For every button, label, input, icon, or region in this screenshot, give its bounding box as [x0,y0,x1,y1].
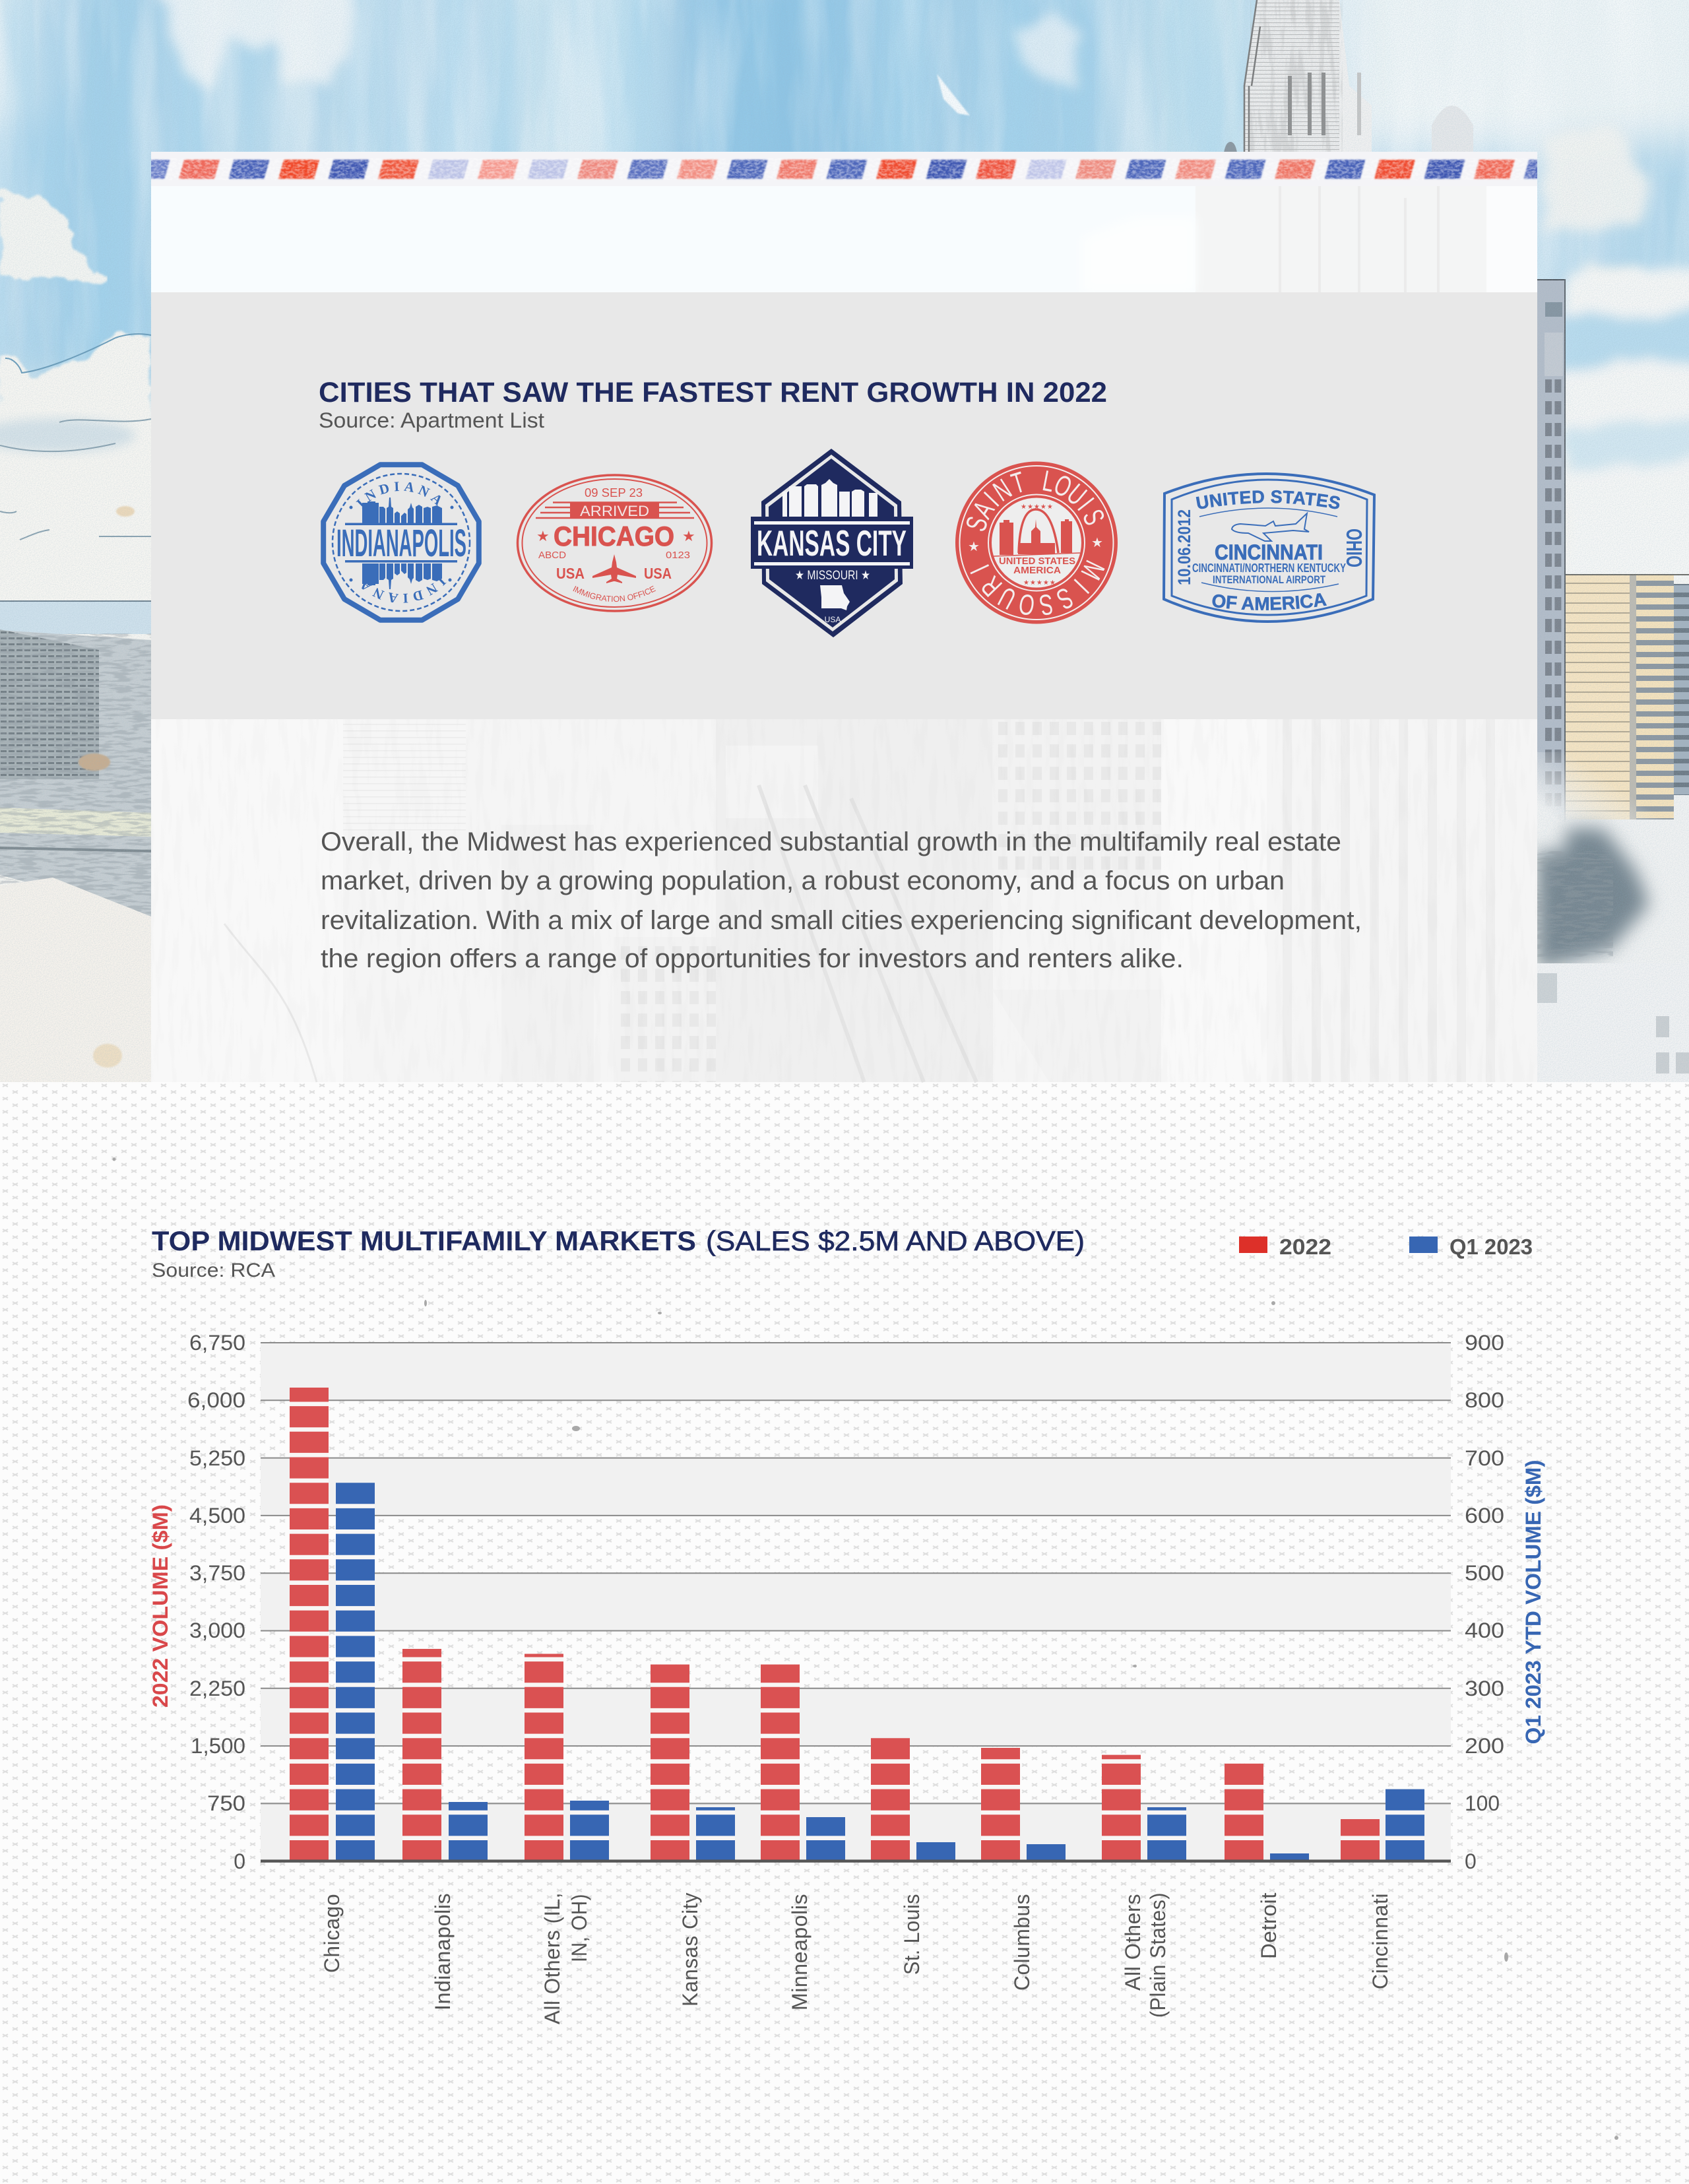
category labels: Cincinnati [1368,1893,1392,1989]
stamp: Kansas City: KANSAS CITY [757,523,907,563]
stamp: Chicago: ★ [682,528,695,544]
stamp: Indianapolis: INDIANA [362,579,446,603]
stamp: Saint Louis: A [966,495,1001,524]
bars: Kansas City [651,1665,735,1861]
left axis labels [187,1331,245,1873]
stamp: Cincinnati: CINCINNATI [1215,540,1323,564]
stamp: Chicago: 0123 [666,550,690,561]
heading: fastest rent growth: CITIES THAT SAW THE FASTEST RENT GROWTH IN 2022 [319,377,1107,408]
stamp: Cincinnati: OHIO [1342,529,1366,567]
right axis labels: 200 [1465,1734,1504,1758]
category labels: Kansas City [678,1892,702,2007]
stamp: Saint Louis: ★ [1091,536,1103,550]
left axis labels: 5,250 [189,1446,245,1470]
stamp: Saint Louis: M [1075,556,1111,585]
right axis labels: 300 [1465,1677,1504,1700]
watercolor grain [0,0,1689,1082]
specks on paper [112,1157,1618,2140]
category labels: Detroit [1257,1892,1281,1959]
bars: Cincinnati [1341,1789,1424,1861]
stamp: Saint Louis: O [1049,468,1077,503]
left column: clouds, lake and city [0,334,151,1082]
stamp: Chicago: ARRIVED [580,503,649,519]
left axis labels: 0 [234,1849,245,1873]
left axis title: 2022 VOLUME ($M) [148,1504,172,1708]
category labels: St. Louis [900,1894,924,1975]
right axis labels: 800 [1465,1388,1504,1412]
legend: Q1 2023 [1450,1235,1533,1259]
stamp: Saint Louis: ★ [968,540,980,554]
bars: All Others (IL, IN, OH) [525,1654,609,1861]
right axis labels: 900 [1465,1331,1504,1355]
right axis labels: 400 [1465,1619,1504,1642]
stamp: Saint Louis: S [1037,588,1056,622]
airmail stripe border [151,158,1537,181]
stamp: Saint Louis: L [1040,464,1057,498]
stamp: Saint Louis: S [1052,581,1078,616]
stamp: Indianapolis: INDIANAPOLIS [336,522,466,565]
stamp: Saint Louis: T [1007,465,1029,500]
right axis labels: 700 [1465,1446,1504,1470]
bars: Columbus [981,1748,1066,1861]
right axis labels: 100 [1465,1791,1500,1815]
stamp: Chicago: USA [556,565,585,582]
stamp: Saint Louis: ★★★★★ [1021,503,1054,511]
text block: Midwest growth summary: market, driven by a growing population, a robust economy, and a focus on urban [321,866,1285,895]
stamp: Saint Louis: S [1076,505,1111,530]
left axis labels: 2,250 [189,1677,245,1700]
left axis labels: 3,750 [189,1561,245,1585]
stamp: Saint Louis: O [1017,587,1036,622]
heading: top midwest multifamily markets: (SALES $2.5M AND ABOVE) [706,1225,1085,1256]
stamp: Indianapolis [321,462,482,623]
stamp: Cincinnati: UNITED STATES [1195,490,1341,509]
left axis labels: 3,000 [189,1619,245,1642]
category labels: Indianapolis [431,1893,455,2010]
left axis labels: 1,500 [191,1734,245,1758]
stamp: Chicago [516,474,713,612]
bars: Chicago [290,1388,375,1861]
stamp: Cincinnati [1163,472,1376,623]
heading: top midwest multifamily markets [152,1225,1085,1256]
stamp: Saint Louis: U [1061,478,1093,511]
category labels: IN, OH) [567,1894,591,1962]
stamp: Saint Louis: I [964,560,996,579]
category labels: (Plain States) [1146,1892,1170,2018]
stamp: Saint Louis: I [978,486,1005,512]
bars: Detroit [1225,1764,1309,1861]
right axis labels [1465,1331,1504,1873]
bars: St. Louis [871,1738,955,1861]
stamp: Kansas City [751,449,913,637]
stamp: Saint Louis: I [1071,492,1100,516]
stamp: Kansas City: USA [825,615,841,624]
stamp: Saint Louis: ★★★★★ [1023,579,1056,587]
right axis labels: 500 [1465,1561,1504,1585]
panel: fastest rent growth cities [151,292,1537,719]
text block: Midwest growth summary [321,827,1362,973]
category labels: Chicago [320,1894,344,1973]
stamp: Cincinnati: 10.06.2012 [1174,509,1194,585]
category labels: Minneapolis [788,1894,812,2010]
legend: 2022 [1279,1235,1331,1259]
legend [1239,1235,1533,1259]
stamp: Saint Louis: S [959,513,994,535]
category labels: Columbus [1010,1894,1034,1991]
stamp: Chicago: 09 SEP 23 [585,486,643,499]
stamp: Saint Louis: UNITED STATES [999,556,1075,567]
stamp: Saint Louis: I [1068,573,1095,600]
stamp: Chicago: ABCD [538,550,566,561]
right axis labels: 600 [1465,1504,1504,1527]
stamp: Saint Louis [955,462,1118,624]
bars: Minneapolis [761,1665,845,1861]
stamp: Cincinnati: CINCINNATI/NORTHERN KENTUCKY [1192,562,1346,575]
bar chart: midwest multifamily sales volume [148,1331,1545,2024]
category labels [320,1892,1392,2024]
x axis line [261,1859,1451,1863]
stamp: Saint Louis: R [974,570,1008,602]
plot bands and grid [261,1343,1451,1861]
left axis labels: 4,500 [189,1504,245,1527]
text block: Midwest growth summary: Overall, the Midwest has experienced substantial growth in the multifamily real estate [321,827,1341,856]
category labels: All Others (IL, [540,1892,564,2024]
heading: top midwest multifamily markets: TOP MIDWEST MULTIFAMILY MARKETS [152,1225,696,1256]
source note: RCA: Source: RCA [152,1260,275,1281]
source note: Source: Apartment List [319,408,544,432]
left axis labels: 6,750 [189,1331,245,1355]
left axis labels: 6,000 [187,1388,245,1412]
right axis title: Q1 2023 YTD VOLUME ($M) [1521,1460,1545,1745]
bars: Indianapolis [402,1649,488,1861]
stamp: Chicago: IMMIGRATION OFFICE [573,586,656,602]
text block: Midwest growth summary: the region offers a range of opportunities for investors and renters alike. [321,944,1184,973]
stamp: Chicago: CHICAGO [554,521,674,552]
stamp: Cincinnati: INTERNATIONAL AIRPORT [1213,573,1325,586]
stamp: Kansas City: ★ MISSOURI ★ [795,569,870,583]
tower in the sky [1224,0,1473,152]
right axis labels: 0 [1465,1849,1477,1873]
stamp: Saint Louis: AMERICA [1013,565,1061,576]
left axis labels: 750 [207,1791,245,1815]
text block: Midwest growth summary: revitalization. With a mix of large and small cities experiencing significant development, [321,906,1362,935]
right column: sky bands and buildings [1537,271,1689,1082]
stamp: Chicago: USA [644,565,672,582]
stamp: Chicago: ★ [536,528,550,544]
stamp: Saint Louis: U [993,581,1021,616]
stamp: Indianapolis: INDIANA [356,482,441,508]
category labels: All Others [1121,1894,1145,1991]
stamp: Saint Louis: N [988,472,1017,507]
bars: All Others (Plain States) [1102,1755,1186,1861]
panel: letter paper [151,152,1537,1082]
illustration: watercolor sky and city skyline [0,0,1689,1082]
stamp: Cincinnati: OF AMERICA [1213,593,1327,610]
